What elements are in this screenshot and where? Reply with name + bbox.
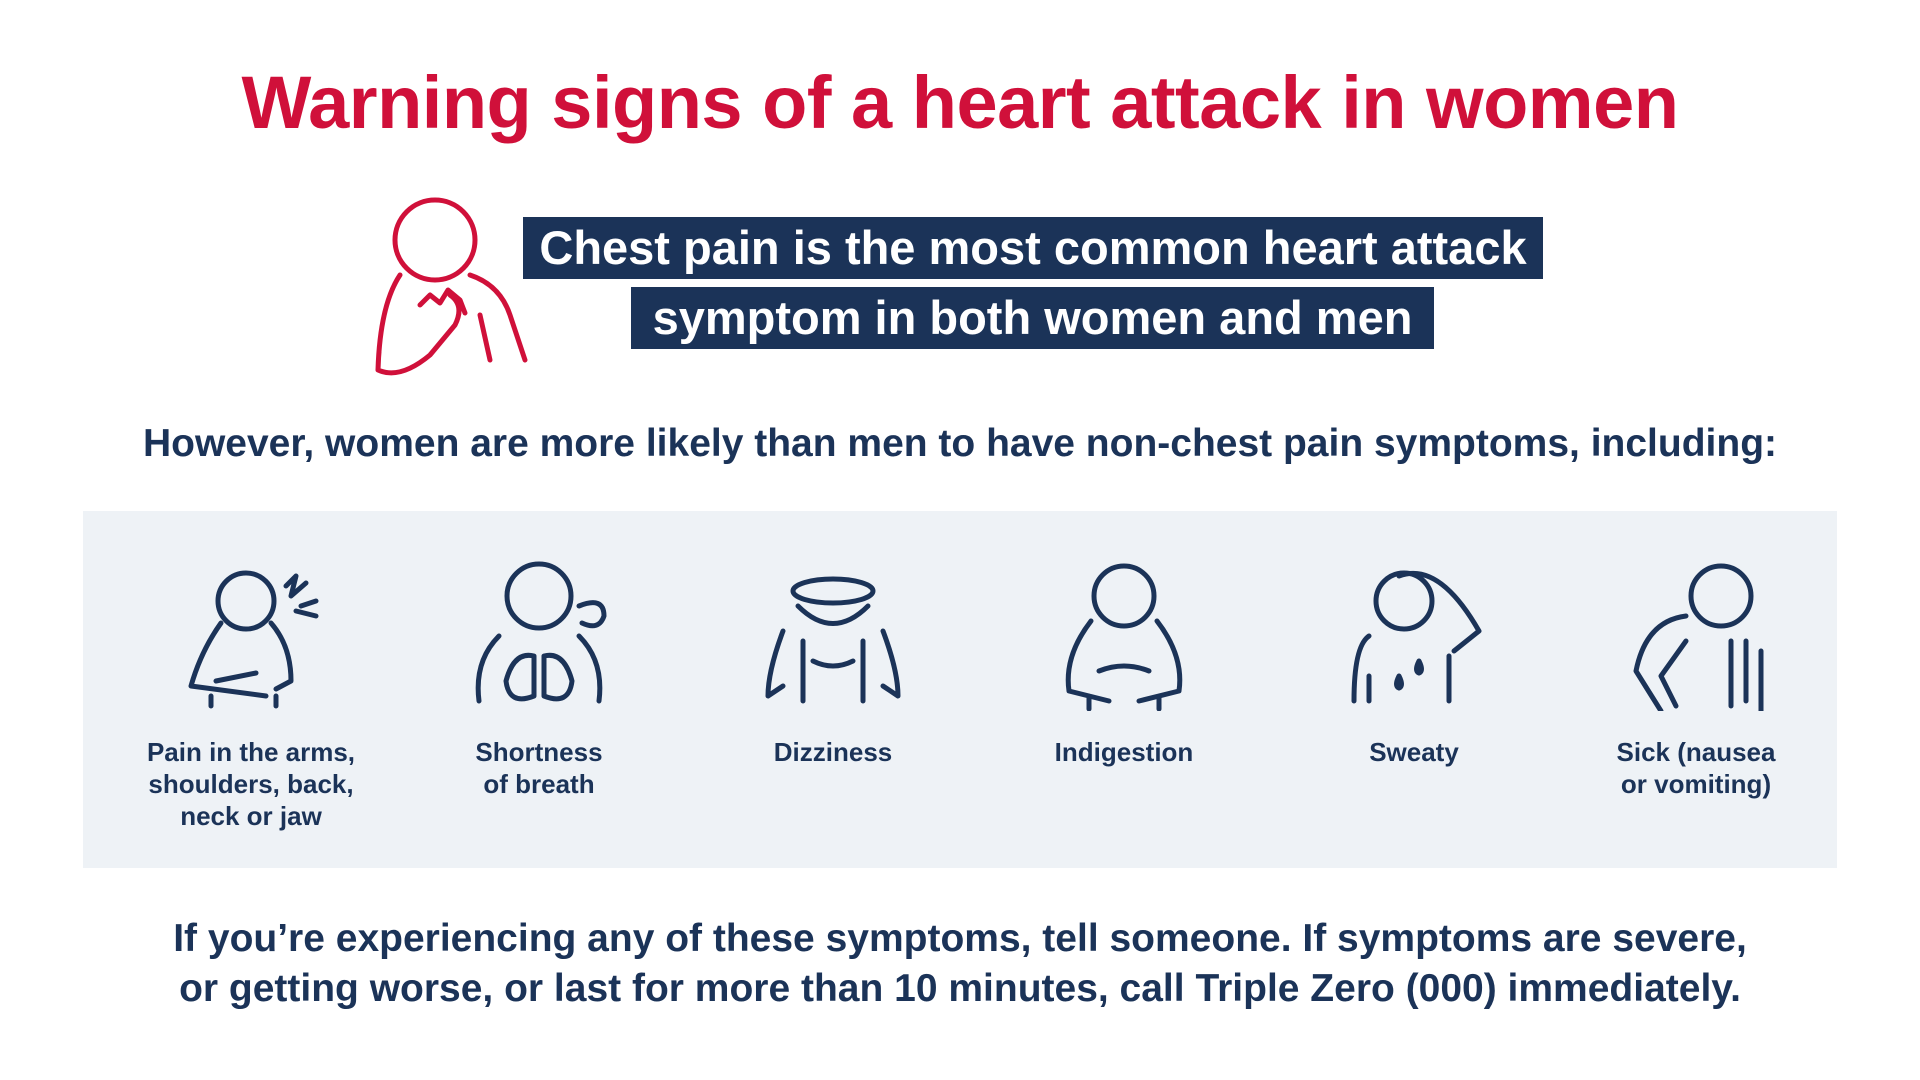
symptom: dizziness: Dizziness	[774, 737, 892, 767]
symptom: breath: of breath	[483, 769, 595, 799]
banner line 1: Chest pain is the most common heart attack	[539, 221, 1527, 274]
icon: chest pain	[376, 198, 528, 376]
symptom: sick	[1616, 564, 1776, 799]
symptom: pain: Pain in the arms,	[147, 737, 355, 767]
symptom: pain	[147, 570, 355, 831]
symptom: sweaty: Sweaty	[1369, 737, 1459, 767]
symptom: pain: neck or jaw	[180, 801, 322, 831]
symptom: dizziness	[766, 576, 900, 767]
panel: symptoms	[83, 511, 1837, 868]
symptom: pain: shoulders, back,	[148, 769, 354, 799]
symptom: sick: or vomiting)	[1621, 769, 1771, 799]
symptom: sweaty	[1352, 570, 1482, 767]
subtitle: However, women are more likely than men to have non-chest pain symptoms, including:	[143, 422, 1777, 465]
banner line 2: symptom in both women and men	[653, 291, 1412, 344]
symptom: indigestion: Indigestion	[1055, 737, 1193, 767]
bottom message: or getting worse, or last for more than 10 minutes, call Triple Zero (000) immediately.	[179, 967, 1741, 1010]
symptom: indigestion	[1055, 564, 1193, 767]
bottom message: If you’re experiencing any of these symptoms, tell someone. If symptoms are severe,	[173, 917, 1747, 960]
bottom message	[173, 917, 1747, 1010]
symptom: sick: Sick (nausea	[1616, 737, 1775, 767]
title: Warning signs of a heart attack in women	[242, 61, 1678, 144]
symptom: breath	[475, 562, 606, 799]
symptom: breath: Shortness	[475, 737, 603, 767]
